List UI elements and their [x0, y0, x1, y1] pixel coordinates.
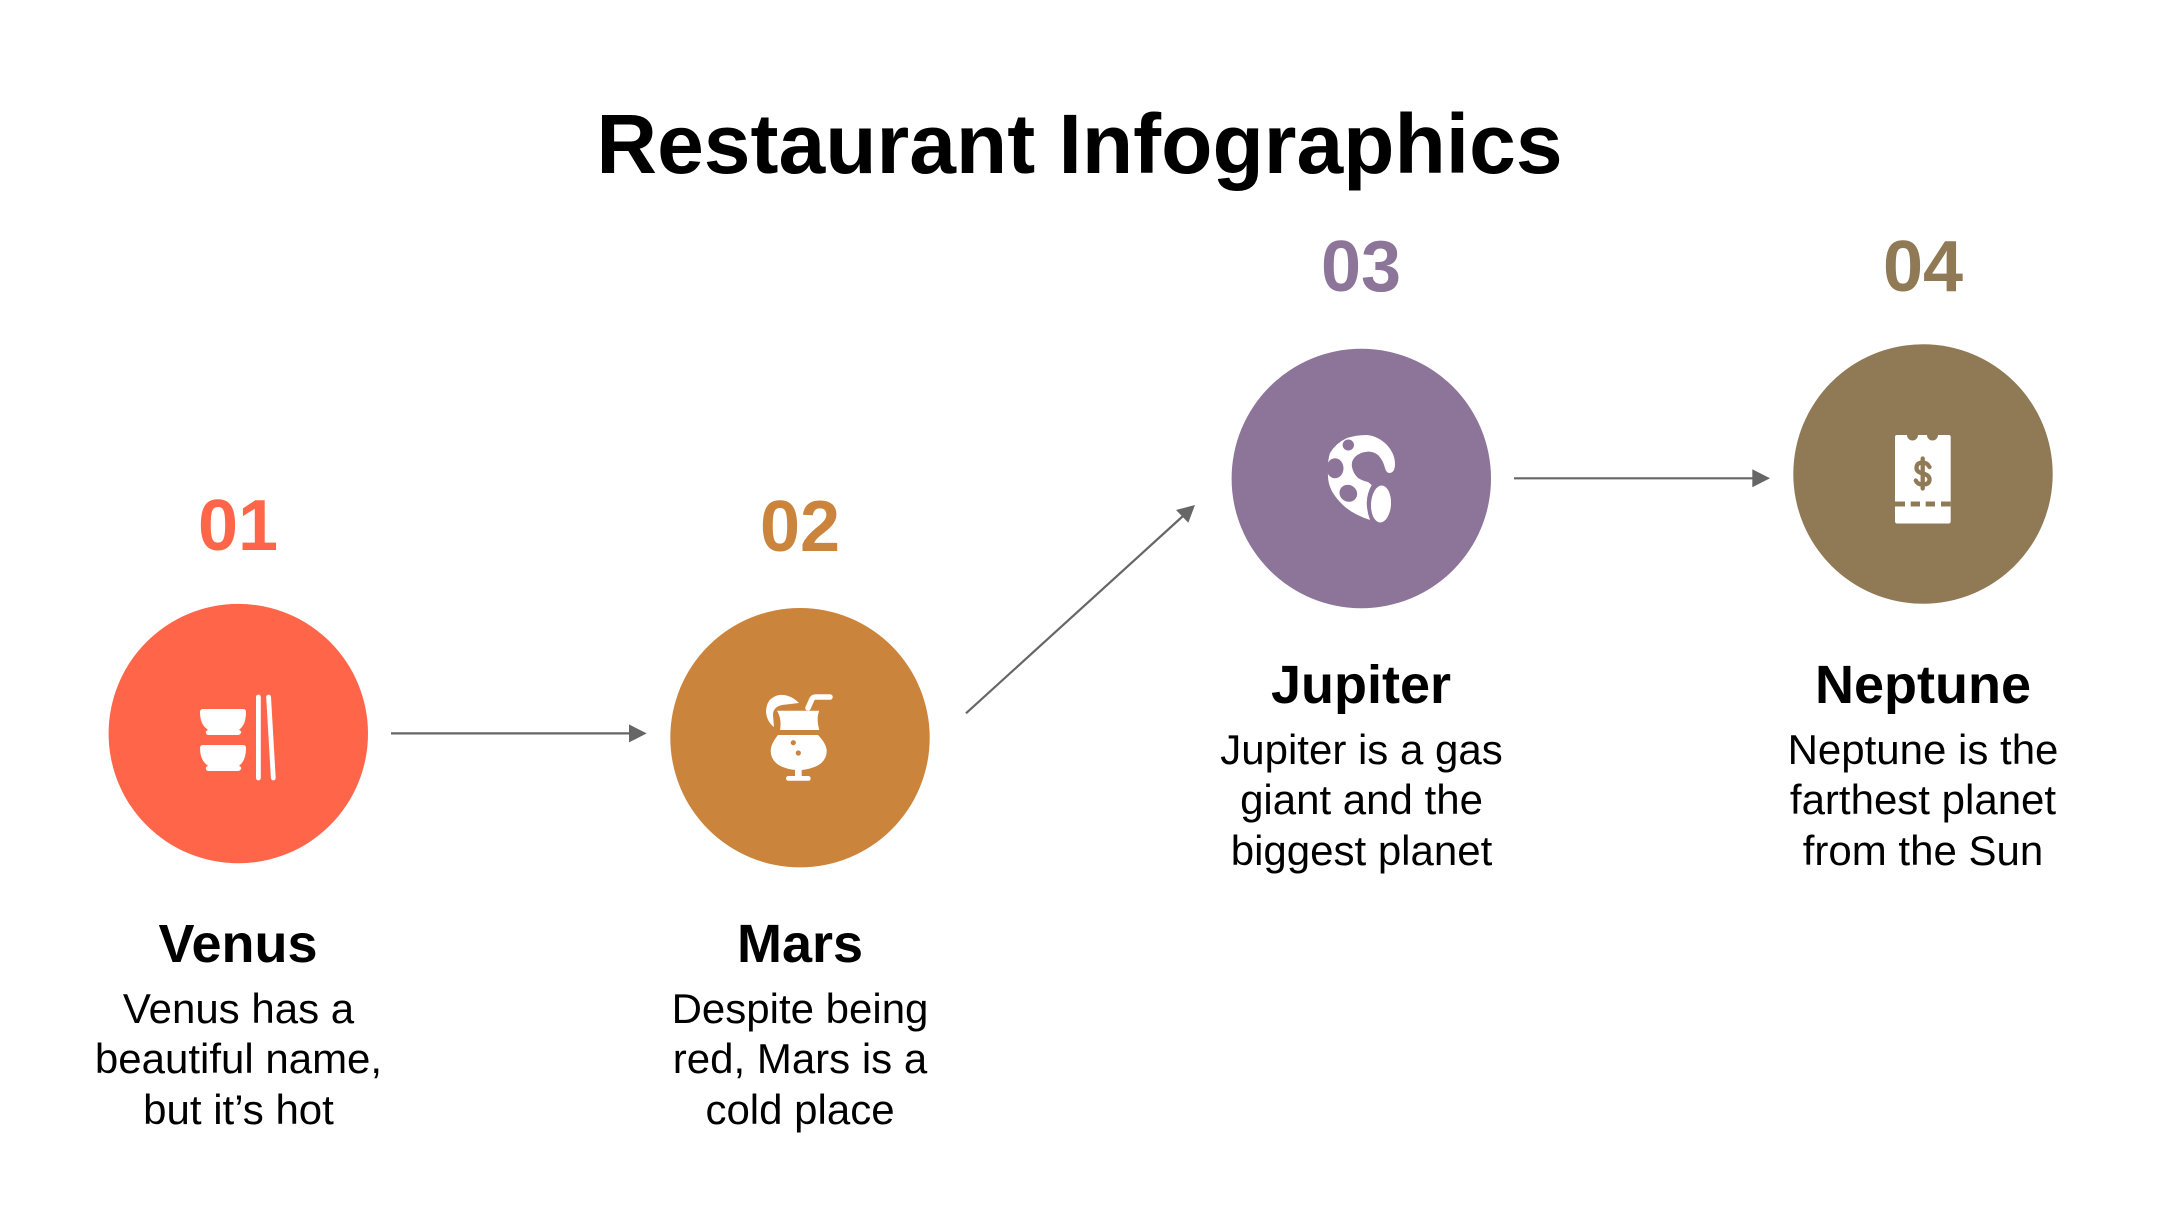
- text: Mars: [672, 985, 928, 1133]
- icon: palette: [1326, 435, 1395, 523]
- icon: receipt: [1895, 435, 1951, 524]
- text: Neptune: from the Sun: [1803, 827, 2043, 874]
- step 01 number: 01: [198, 486, 278, 566]
- circle: Venus: [109, 604, 368, 863]
- arrow: 01 to 02: [391, 724, 647, 742]
- icon: cocktail: [766, 695, 830, 781]
- step 04 number: 04: [1883, 227, 1963, 307]
- arrow: 02 to 03: [966, 505, 1195, 713]
- circle: Mars: [670, 608, 930, 867]
- heading: Neptune: Neptune: [1815, 655, 2031, 715]
- heading: Venus: Venus: [158, 914, 318, 974]
- text: Mars: Despite being: [672, 985, 928, 1032]
- step 02 number: 02: [760, 487, 840, 567]
- text: Neptune: Neptune is the: [1788, 726, 2058, 773]
- text: Jupiter: Jupiter is a gas: [1220, 726, 1503, 773]
- text: Venus: [95, 985, 382, 1133]
- step 03 number: 03: [1321, 227, 1401, 307]
- heading: Jupiter: Jupiter: [1271, 655, 1451, 715]
- text: Jupiter: [1220, 726, 1503, 874]
- title: Restaurant Infographics: [596, 97, 1563, 191]
- arrow: 03 to 04: [1514, 469, 1770, 487]
- circle: Jupiter: [1232, 349, 1491, 608]
- text: Venus: but it’s hot: [143, 1086, 334, 1133]
- text: Mars: red, Mars is a: [673, 1035, 927, 1082]
- text: Jupiter: giant and the: [1240, 776, 1483, 823]
- text: Jupiter: biggest planet: [1231, 827, 1492, 874]
- text: Neptune: [1788, 726, 2058, 874]
- icon: bowls and chopsticks: [200, 697, 273, 778]
- text: Venus: Venus has a: [123, 985, 354, 1032]
- heading: Mars: Mars: [737, 914, 863, 974]
- text: Mars: cold place: [705, 1086, 895, 1133]
- text: Neptune: farthest planet: [1790, 776, 2056, 823]
- text: Venus: beautiful name,: [95, 1035, 382, 1082]
- circle: Neptune: [1793, 344, 2053, 604]
